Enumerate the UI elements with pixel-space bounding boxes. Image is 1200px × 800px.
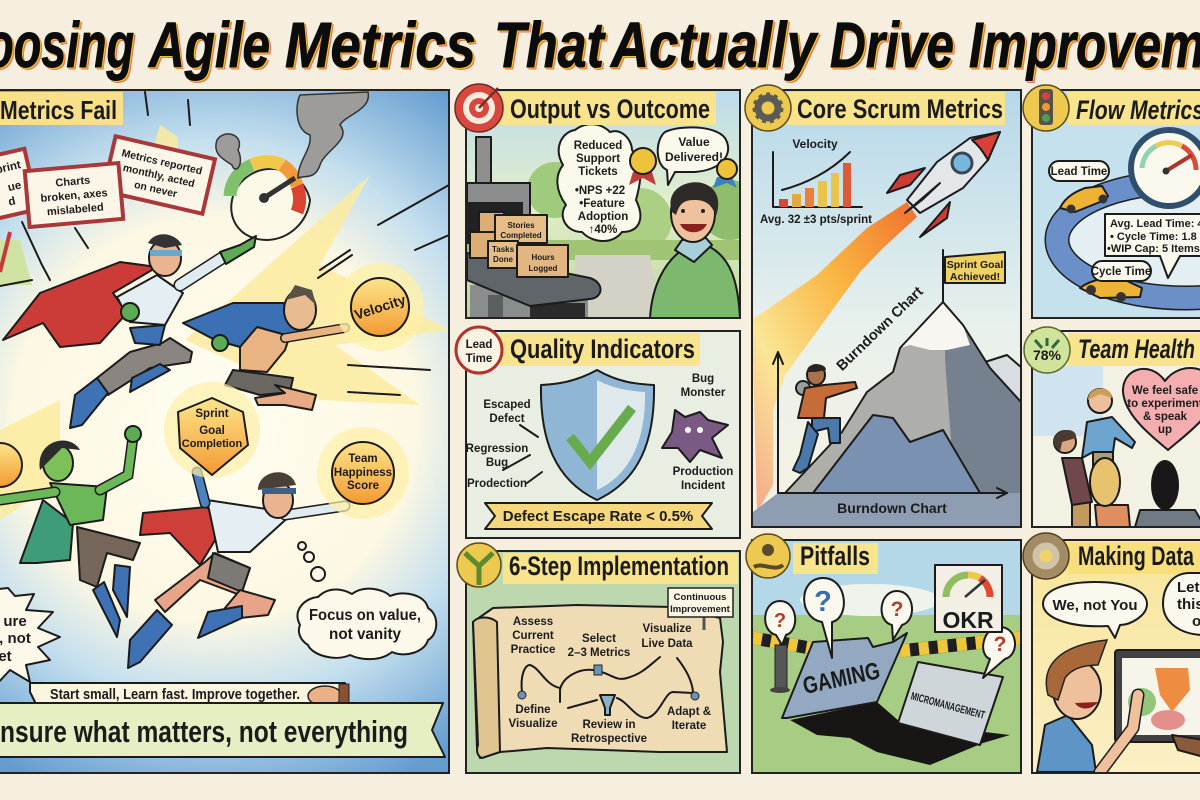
banner: measure what matters xyxy=(0,703,445,757)
icon: small medal xyxy=(713,159,737,188)
orb: sprint goal completion xyxy=(164,382,260,478)
boxes: Tasks xyxy=(492,245,515,254)
label: lead time xyxy=(1049,161,1109,181)
panel: team health xyxy=(1033,332,1200,527)
step labels: Select xyxy=(582,633,616,645)
panel heading: Pitfalls xyxy=(800,541,870,571)
road xyxy=(1057,182,1200,298)
orb: velocity xyxy=(336,263,424,351)
icon: target xyxy=(455,84,503,132)
heart callout: up xyxy=(1158,424,1172,436)
icon: traffic light xyxy=(1023,85,1069,131)
info callout: •WIP Cap: 5 Items xyxy=(1107,243,1200,255)
continuous improvement tag: Improvement xyxy=(670,604,731,615)
cloud: outcomes: •NPS +22 xyxy=(575,185,625,197)
panel: making data xyxy=(1033,541,1200,773)
sign: left sprint xyxy=(0,146,31,220)
boxes: Completed xyxy=(500,231,542,240)
labels: defects xyxy=(466,399,531,490)
boxes: Done xyxy=(493,255,514,264)
sign: gauge okr: OKR xyxy=(942,607,994,633)
partial second person xyxy=(1172,735,1200,757)
flag: sprint goal achieved: Achieved! xyxy=(950,271,1000,283)
step labels: Practice xyxy=(511,644,555,656)
banner: defect escape rate xyxy=(485,503,712,529)
heart callout xyxy=(1123,368,1200,450)
banner: defect escape rate: Defect Escape Rate < 0.5% xyxy=(503,508,693,525)
orb: sprint goal completion: Sprint xyxy=(195,408,229,420)
velocity bar chart: Avg. 32 ±3 pts/sprint xyxy=(760,214,872,226)
cloud: outcomes: •Feature xyxy=(579,198,625,210)
labels: defects: Bug xyxy=(486,457,508,469)
label: burndown bottom: Burndown Chart xyxy=(837,500,947,516)
callout: measure burst xyxy=(0,588,60,686)
callout: focus on value: Focus on value, xyxy=(309,607,421,624)
step labels: Define xyxy=(515,704,551,716)
sign: charts broken xyxy=(25,163,123,227)
orb: team happiness: Team xyxy=(348,453,378,465)
labels: defects: Defect xyxy=(489,413,525,425)
factory xyxy=(467,137,530,243)
question bubbles xyxy=(765,578,1015,678)
step labels: Iterate xyxy=(672,720,706,732)
cloud: outcomes xyxy=(557,124,640,241)
banner: measure what matters: nsure what matters, not everything xyxy=(0,714,408,749)
title xyxy=(0,9,1200,81)
icon: handshake xyxy=(307,684,350,702)
burst rays xyxy=(0,125,450,520)
broken gauge xyxy=(230,162,310,240)
step labels: Adapt & xyxy=(667,706,711,718)
callout: focus on value xyxy=(298,589,436,659)
funnel and markers xyxy=(518,665,699,715)
question bubbles: ? xyxy=(814,586,832,618)
flag: sprint goal achieved xyxy=(943,250,1005,302)
boxes: Stories xyxy=(507,221,535,230)
hero: red cape xyxy=(3,234,256,428)
label: lead time: Lead Time xyxy=(1051,166,1107,178)
label: cycle time: Cycle Time xyxy=(1091,266,1151,278)
sign: charts broken: Charts xyxy=(55,175,91,190)
icon: gear making data xyxy=(1023,533,1069,579)
hero: white red cape lower xyxy=(128,472,345,668)
icon: gear xyxy=(745,85,791,131)
boxes: Hours xyxy=(531,253,555,262)
panel heading: 6-Step Implementation xyxy=(509,551,729,581)
cloud: outcomes: Tickets xyxy=(578,166,618,178)
boxes: Logged xyxy=(529,264,558,273)
people xyxy=(1054,388,1200,527)
orb: sprint goal completion: Goal xyxy=(199,425,225,437)
callout: we not you xyxy=(1043,582,1147,638)
rocket xyxy=(887,132,1000,237)
panel: why metrics fail xyxy=(0,90,450,773)
banner: start small xyxy=(30,683,345,704)
info callout xyxy=(1105,214,1200,278)
hiker xyxy=(793,364,857,473)
icon: quicksand xyxy=(746,534,790,578)
bug monster: Bug xyxy=(692,373,714,385)
ground band xyxy=(753,493,1021,527)
panel heading: Output vs Outcome xyxy=(510,94,710,124)
man in green xyxy=(650,182,740,318)
thought dots xyxy=(298,542,325,581)
step labels: Review in xyxy=(582,719,636,731)
sign: left sprint: d xyxy=(7,195,17,209)
pit xyxy=(790,702,1010,765)
bug monster: Production xyxy=(673,466,733,478)
orb: velocity: Velocity xyxy=(352,291,408,323)
bug monster: Monster xyxy=(681,387,726,399)
clouds xyxy=(800,584,940,616)
step labels: Visualize xyxy=(508,718,558,730)
icon: lead time xyxy=(456,327,502,373)
cloud: outcomes: Reduced xyxy=(574,140,622,152)
callout: lets xyxy=(1163,573,1200,635)
question bubbles: ? xyxy=(994,633,1006,656)
orb: team happiness xyxy=(317,427,409,519)
orb: partial left xyxy=(0,443,22,487)
label: cycle time xyxy=(1091,261,1151,281)
icon: y fork xyxy=(457,543,501,587)
step labels: Assess xyxy=(513,616,553,628)
continuous improvement tag: Continuous xyxy=(674,592,726,603)
hero: green xyxy=(0,426,141,637)
sign: metrics reported monthly xyxy=(103,136,215,214)
title: Actually xyxy=(609,9,819,81)
step labels: 2–3 Metrics xyxy=(568,647,630,659)
banner: start small: Start small, Learn fast. Improve together. xyxy=(50,687,300,703)
figure silhouette xyxy=(770,645,790,693)
slab: micromanagement: MICROMANAGEMENT xyxy=(910,690,986,722)
car: cycle time xyxy=(1080,278,1142,302)
title: Drive xyxy=(830,9,954,81)
conveyor belt xyxy=(467,253,601,318)
icon: 78 percent xyxy=(1024,327,1070,373)
icon: medal xyxy=(629,148,656,185)
orb: sprint goal completion: Completion xyxy=(182,438,243,450)
bug monster xyxy=(662,373,733,492)
continuous improvement tag xyxy=(668,588,733,630)
panel: core scrum metrics xyxy=(752,91,1022,527)
label: burndown diagonal: Burndown Chart xyxy=(834,284,927,374)
bug monster: Incident xyxy=(681,480,725,492)
step labels: Live Data xyxy=(641,638,693,650)
callout: value delivered: Value xyxy=(678,135,710,149)
sign: charts broken: broken, axes xyxy=(40,187,108,205)
broken chart xyxy=(0,222,50,286)
panel heading: Core Scrum Metrics xyxy=(797,94,1003,124)
panel: pitfalls xyxy=(753,541,1021,773)
flag: sprint goal achieved: Sprint Goal xyxy=(947,259,1003,271)
labels: defects: Prodection xyxy=(467,478,527,490)
callout: measure burst: , not xyxy=(0,630,31,647)
sign: metrics reported monthly: on never xyxy=(133,179,178,200)
callout: value delivered: Delivered! xyxy=(665,150,723,164)
heart callout: We feel safe xyxy=(1132,385,1198,397)
path arrows xyxy=(522,657,693,718)
velocity bar chart xyxy=(760,137,872,226)
cloud: outcomes: Adoption xyxy=(578,211,628,223)
panel heading: Quality Indicators xyxy=(510,334,695,364)
question bubbles: ? xyxy=(891,598,903,621)
panel: flow metrics xyxy=(1033,91,1200,318)
hero: blue cape xyxy=(183,285,345,410)
boxes xyxy=(470,212,568,277)
panel: 6-step implementation xyxy=(467,551,740,773)
orb: team happiness: Happiness xyxy=(334,467,392,479)
icon: lead time: Lead xyxy=(466,339,492,351)
question bubbles: ? xyxy=(774,610,786,632)
step labels xyxy=(508,616,711,745)
title: That xyxy=(494,9,606,81)
car: lead time xyxy=(1060,186,1108,214)
icon: 78 percent: 78% xyxy=(1033,347,1062,363)
arrows: defects to shield xyxy=(503,425,542,483)
tablet xyxy=(1115,650,1200,742)
slab: gaming xyxy=(782,633,907,718)
panel: quality indicators xyxy=(466,332,740,538)
step labels: Retrospective xyxy=(571,733,647,745)
burndown chart axes xyxy=(773,352,1007,498)
cloud: outcomes: ↑40% xyxy=(589,224,617,236)
step labels: Visualize xyxy=(642,623,692,635)
labels: defects: Regression xyxy=(466,443,528,455)
callout: value delivered xyxy=(658,127,728,185)
presenter xyxy=(1037,640,1138,772)
trees and path xyxy=(467,162,760,318)
title: Metrics xyxy=(285,9,476,81)
labels: defects: Escaped xyxy=(483,399,531,411)
cloud: outcomes: Support xyxy=(576,153,620,165)
smoke xyxy=(216,92,368,178)
slab: micromanagement xyxy=(898,662,1003,745)
sign: metrics reported monthly: Metrics reported xyxy=(120,147,203,177)
speed lines xyxy=(75,92,449,395)
shield xyxy=(541,370,654,500)
gauge xyxy=(1131,130,1200,206)
step labels: Current xyxy=(512,630,554,642)
sign: charts broken: mislabeled xyxy=(46,201,104,218)
callout: focus on value: not vanity xyxy=(329,626,401,643)
orb: team happiness: Score xyxy=(347,480,379,492)
rocket flame xyxy=(752,202,917,512)
parchment scroll xyxy=(473,605,727,758)
callout: we not you: We, not You xyxy=(1052,597,1138,614)
sign: metrics reported monthly: monthly, acted xyxy=(122,162,196,190)
heart callout: & speak xyxy=(1143,411,1188,423)
slab: gaming: GAMING xyxy=(800,657,882,700)
velocity bar chart: Velocity xyxy=(792,137,838,151)
panel heading: Metrics Fail xyxy=(0,95,117,125)
sign: left sprint: ue xyxy=(7,180,23,194)
sign: gauge okr xyxy=(935,565,1002,633)
hazard tape xyxy=(753,638,1021,651)
title: Agile xyxy=(147,9,270,81)
callout: measure burst: ure xyxy=(3,613,27,630)
mountain xyxy=(785,302,1022,493)
panel: output vs outcome xyxy=(467,91,760,318)
icon: lead time: Time xyxy=(466,353,492,365)
